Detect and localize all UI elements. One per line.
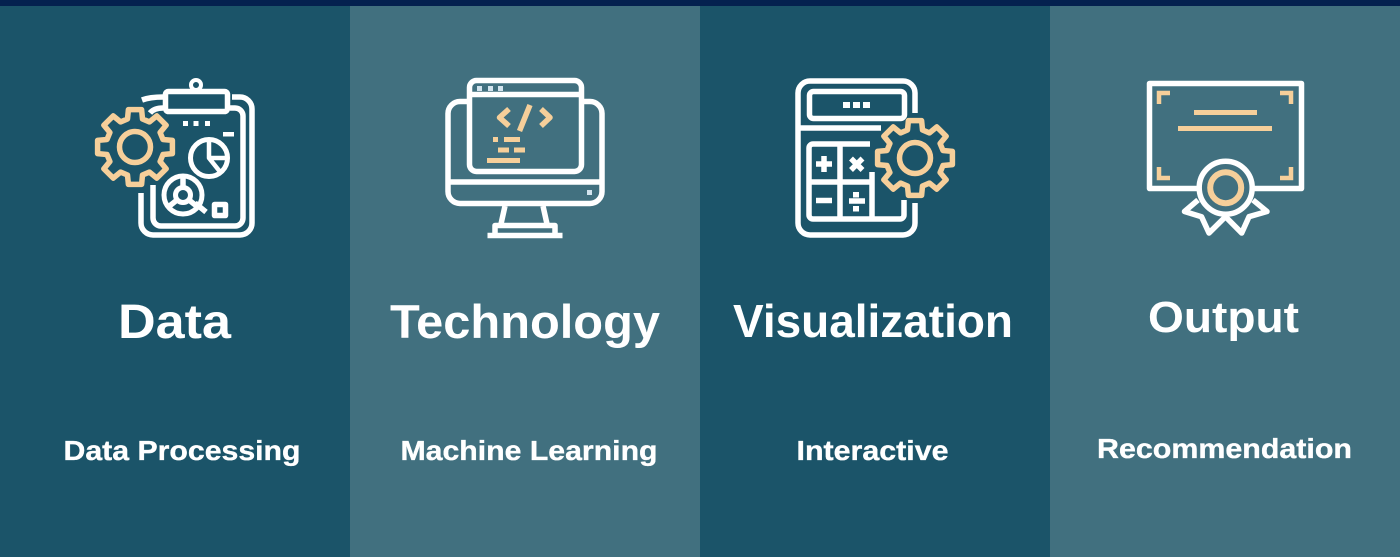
panel: data <box>0 6 350 557</box>
label: Machine Learning: Machine Learning <box>400 435 658 466</box>
label: Interactive: Interactive <box>796 435 948 466</box>
heading: Data: Data <box>118 296 231 349</box>
icon: clipboard with gear <box>98 80 252 235</box>
heading: Output: Output <box>1148 293 1299 342</box>
label: Data Processing: Data Processing <box>64 435 300 466</box>
heading: Visualization: Visualization <box>733 295 1013 347</box>
panel: output <box>1050 6 1400 557</box>
heading: Technology: Technology <box>390 295 660 348</box>
label: Recommendation: Recommendation <box>1097 433 1352 464</box>
top navy strip <box>0 0 1400 6</box>
panel: technology <box>350 6 700 557</box>
icon: monitor with code window <box>448 80 602 236</box>
icon: calculator with gear <box>798 81 952 235</box>
icon: certificate with medal <box>1150 84 1302 233</box>
panel: visualization <box>700 6 1050 557</box>
